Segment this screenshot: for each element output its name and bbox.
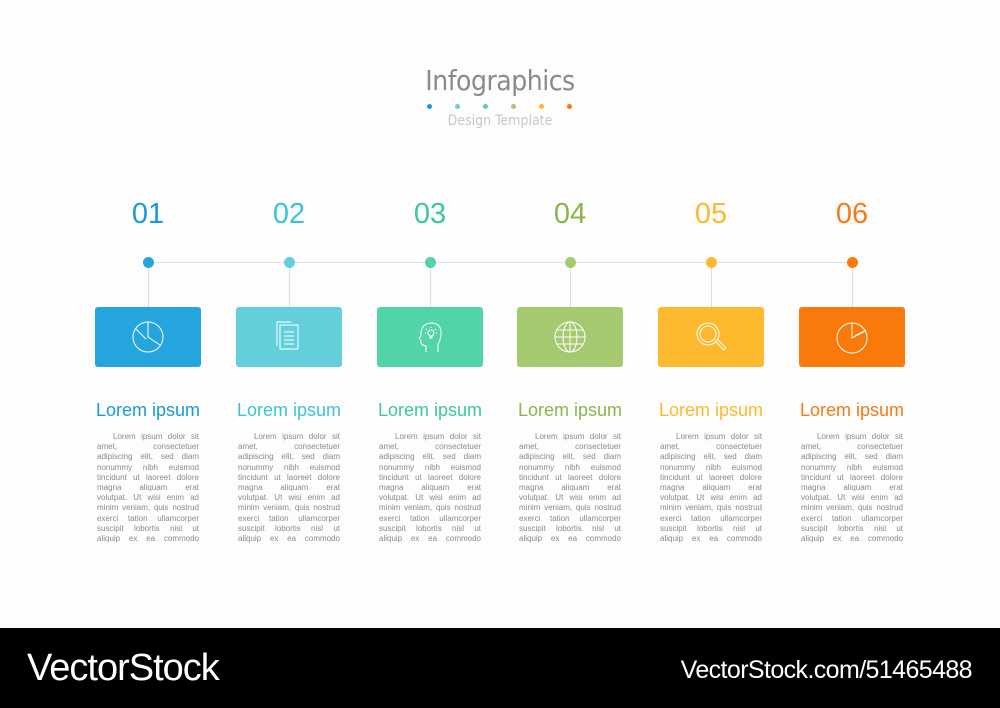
text: exerci tation ullamcorper bbox=[660, 514, 762, 522]
timeline line bbox=[148, 262, 852, 263]
text: aliquip ex ea commodo bbox=[238, 534, 340, 543]
text: 02 bbox=[273, 198, 305, 230]
text: Lorem ipsum dolor sit bbox=[676, 432, 762, 441]
text: aliquip ex ea commodo bbox=[660, 534, 762, 543]
text: adipiscing elit, sed diam bbox=[660, 452, 762, 461]
text: amet, consectetuer bbox=[660, 442, 762, 451]
text: suscipit lobortis nisl ut bbox=[519, 524, 621, 533]
text: amet, consectetuer bbox=[97, 442, 199, 451]
text: 03 bbox=[414, 198, 446, 230]
text: adipiscing elit, sed diam bbox=[801, 452, 903, 461]
step 05 bbox=[658, 198, 764, 543]
text: tincidunt ut laoreet dolore bbox=[660, 473, 762, 482]
text: minim veniam, quis nostrud bbox=[801, 503, 903, 512]
text: volutpat. Ut wisi enim ad bbox=[379, 493, 481, 502]
text: exerci tation ullamcorper bbox=[238, 514, 340, 522]
icon box 06 bbox=[799, 307, 905, 367]
text: exerci tation ullamcorper bbox=[97, 514, 199, 522]
text: magna aliquam erat bbox=[660, 483, 762, 492]
text: Lorem ipsum dolor sit bbox=[254, 432, 340, 441]
text: volutpat. Ut wisi enim ad bbox=[801, 493, 903, 502]
text: Lorem ipsum dolor sit bbox=[535, 432, 621, 441]
text: magna aliquam erat bbox=[379, 483, 481, 492]
text: exerci tation ullamcorper bbox=[801, 514, 903, 522]
text: volutpat. Ut wisi enim ad bbox=[238, 493, 340, 502]
text: Lorem ipsum bbox=[518, 400, 622, 420]
text: adipiscing elit, sed diam bbox=[379, 452, 481, 461]
text: 04 bbox=[554, 198, 586, 230]
text: tincidunt ut laoreet dolore bbox=[379, 473, 481, 482]
text: aliquip ex ea commodo bbox=[379, 534, 481, 543]
text: adipiscing elit, sed diam bbox=[238, 452, 340, 461]
text: amet, consectetuer bbox=[801, 442, 903, 451]
footer url: VectorStock.com/51465488 bbox=[681, 656, 972, 684]
text: minim veniam, quis nostrud bbox=[97, 503, 199, 512]
text: amet, consectetuer bbox=[519, 442, 621, 451]
text: amet, consectetuer bbox=[238, 442, 340, 451]
text: Lorem ipsum dolor sit bbox=[113, 432, 199, 441]
text: minim veniam, quis nostrud bbox=[660, 503, 762, 512]
step 01 bbox=[95, 198, 201, 543]
text: minim veniam, quis nostrud bbox=[519, 503, 621, 512]
text: minim veniam, quis nostrud bbox=[379, 503, 481, 512]
text: nonummy nibh euismod bbox=[97, 463, 199, 472]
text: Lorem ipsum bbox=[237, 400, 341, 420]
text: exerci tation ullamcorper bbox=[519, 514, 621, 522]
title dots bbox=[427, 104, 572, 109]
text: suscipit lobortis nisl ut bbox=[801, 524, 903, 533]
text: tincidunt ut laoreet dolore bbox=[97, 473, 199, 482]
text: 06 bbox=[836, 198, 868, 230]
text: suscipit lobortis nisl ut bbox=[660, 524, 762, 533]
text: magna aliquam erat bbox=[238, 483, 340, 492]
subtitle: Design Template bbox=[448, 113, 552, 129]
text: magna aliquam erat bbox=[801, 483, 903, 492]
step 03 bbox=[377, 198, 483, 543]
text: magna aliquam erat bbox=[519, 483, 621, 492]
text: adipiscing elit, sed diam bbox=[519, 452, 621, 461]
text: nonummy nibh euismod bbox=[801, 463, 903, 472]
text: aliquip ex ea commodo bbox=[801, 534, 903, 543]
text: tincidunt ut laoreet dolore bbox=[801, 473, 903, 482]
text: 01 bbox=[132, 198, 164, 230]
text: exerci tation ullamcorper bbox=[379, 514, 481, 522]
text: adipiscing elit, sed diam bbox=[97, 452, 199, 461]
text: amet, consectetuer bbox=[379, 442, 481, 451]
step 06 bbox=[799, 198, 905, 543]
text: tincidunt ut laoreet dolore bbox=[519, 473, 621, 482]
text: aliquip ex ea commodo bbox=[519, 534, 621, 543]
text: nonummy nibh euismod bbox=[660, 463, 762, 472]
text: Lorem ipsum bbox=[378, 400, 482, 420]
text: nonummy nibh euismod bbox=[519, 463, 621, 472]
text: nonummy nibh euismod bbox=[238, 463, 340, 472]
text: aliquip ex ea commodo bbox=[97, 534, 199, 543]
footer bar bbox=[0, 628, 1000, 708]
text: Lorem ipsum bbox=[800, 400, 904, 420]
text: volutpat. Ut wisi enim ad bbox=[519, 493, 621, 502]
text: volutpat. Ut wisi enim ad bbox=[97, 493, 199, 502]
title: Infographics bbox=[425, 64, 575, 97]
text: Lorem ipsum bbox=[96, 400, 200, 420]
text: tincidunt ut laoreet dolore bbox=[238, 473, 340, 482]
footer brand: VectorStock bbox=[27, 647, 219, 689]
text: magna aliquam erat bbox=[97, 483, 199, 492]
text: Lorem ipsum bbox=[659, 400, 763, 420]
text: volutpat. Ut wisi enim ad bbox=[660, 493, 762, 502]
text: Lorem ipsum dolor sit bbox=[395, 432, 481, 441]
text: nonummy nibh euismod bbox=[379, 463, 481, 472]
text: suscipit lobortis nisl ut bbox=[97, 524, 199, 533]
icon box 01 bbox=[95, 307, 201, 367]
text: 05 bbox=[695, 198, 727, 230]
text: Lorem ipsum dolor sit bbox=[817, 432, 903, 441]
icon box 02 bbox=[236, 307, 342, 367]
text: suscipit lobortis nisl ut bbox=[238, 524, 340, 533]
text: minim veniam, quis nostrud bbox=[238, 503, 340, 512]
text: suscipit lobortis nisl ut bbox=[379, 524, 481, 533]
icon box 03 bbox=[377, 307, 483, 367]
icon box 04 bbox=[517, 307, 623, 367]
icon box 05 bbox=[658, 307, 764, 367]
step 02 bbox=[236, 198, 342, 543]
step 04 bbox=[517, 198, 623, 543]
